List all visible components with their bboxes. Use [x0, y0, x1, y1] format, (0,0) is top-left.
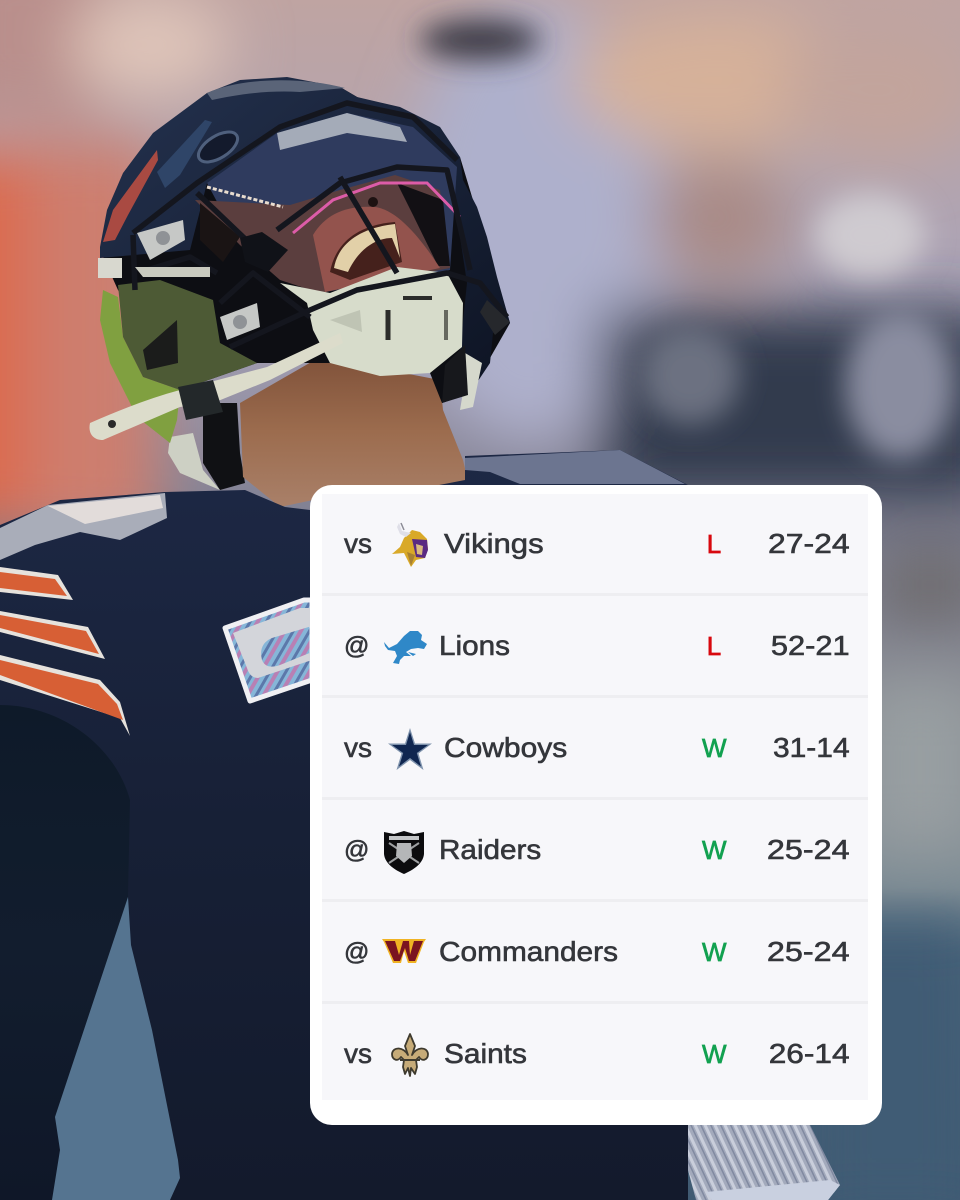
row: Saints: Saints	[444, 1038, 527, 1069]
row: Saints: 26-14	[769, 1038, 850, 1069]
chin strap	[90, 333, 343, 440]
captain patch	[225, 600, 312, 701]
glove at bottom	[688, 1125, 840, 1200]
helmet side padding	[100, 290, 180, 443]
neck	[240, 357, 470, 507]
icon: Lions logo	[384, 631, 427, 664]
icon: Saints fleur-de-lis	[391, 1033, 429, 1077]
schedule table	[322, 494, 868, 1100]
row: Commanders: 25-24	[767, 936, 850, 967]
row: Commanders: @	[344, 938, 369, 966]
row: Vikings	[322, 494, 868, 596]
row: Commanders	[322, 902, 868, 1004]
row: Raiders	[322, 800, 868, 902]
right helmet pad	[460, 350, 482, 410]
row: Lions: @	[344, 632, 369, 660]
helmet lights and bumpers	[137, 220, 185, 260]
row: Cowboys: vs	[344, 732, 372, 763]
row: Lions: 52-21	[771, 630, 850, 661]
row: Vikings: Vikings	[444, 528, 544, 559]
schedule card	[310, 485, 882, 1125]
row: Raiders: W	[702, 835, 727, 865]
shoulder trim	[0, 493, 167, 560]
row: Lions: L	[707, 631, 721, 661]
visor	[207, 113, 457, 293]
helmet dark base silhouette	[100, 87, 510, 403]
sleeve shadow	[0, 705, 130, 1200]
row: Vikings: vs	[344, 528, 372, 559]
row: Raiders: Raiders	[439, 834, 541, 865]
row: Commanders: W	[702, 937, 727, 967]
chin guard	[280, 267, 463, 376]
row: Cowboys	[322, 698, 868, 800]
row: Lions: Lions	[439, 630, 510, 661]
player jersey and shoulders	[0, 450, 840, 1200]
face behind visor	[195, 175, 450, 293]
row: Cowboys: Cowboys	[444, 732, 567, 763]
icon: Vikings logo	[392, 522, 428, 567]
helmet rear strap and pad	[168, 403, 245, 490]
row: Lions	[322, 596, 868, 698]
row: Raiders: 25-24	[767, 834, 850, 865]
row: Saints: vs	[344, 1038, 372, 1069]
jersey sleeve stripes	[0, 567, 130, 736]
icon: Raiders shield	[384, 831, 424, 874]
row: Cowboys: 31-14	[773, 732, 850, 763]
row: Vikings: 27-24	[768, 528, 850, 559]
row: Raiders: @	[344, 836, 369, 864]
icon: Commanders W	[382, 939, 426, 963]
helmet	[90, 77, 510, 443]
row: Commanders: Commanders	[439, 936, 618, 967]
icon: Cowboys star	[388, 728, 432, 770]
row: Cowboys: W	[702, 733, 727, 763]
row: Saints: W	[702, 1039, 727, 1069]
row: Vikings: L	[707, 529, 721, 559]
background gap between arm and torso	[52, 897, 180, 1200]
facemask bars	[133, 103, 507, 347]
helmet shell	[100, 77, 510, 403]
row: Saints	[344, 1033, 850, 1077]
